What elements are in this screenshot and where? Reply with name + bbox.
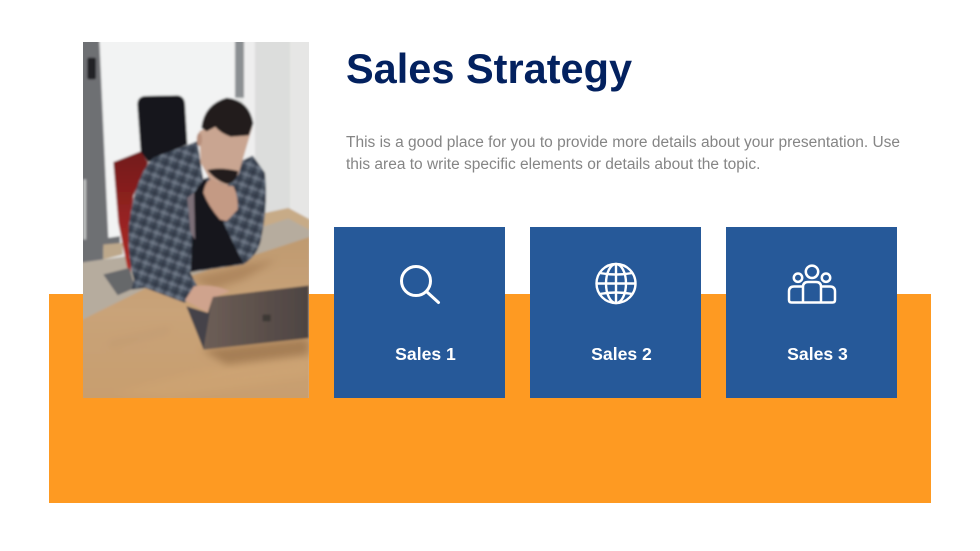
neck and face: [199, 119, 253, 186]
floor and baseboard: [80, 218, 310, 323]
label: Sales 3: Sales 3: [787, 344, 848, 364]
table: [80, 237, 310, 400]
description text: this area to write specific elements or details about the topic.: [346, 156, 760, 173]
label: Sales 1: Sales 1: [395, 344, 456, 364]
laptop: [186, 296, 213, 350]
chair: [137, 95, 187, 162]
title: Sales Strategy: [346, 45, 632, 92]
beard: [207, 169, 238, 184]
orange background band: [49, 294, 931, 503]
shadow beside arm: [190, 260, 277, 290]
dark tee: [191, 178, 243, 272]
wall and window: [80, 39, 313, 400]
hair: [201, 98, 253, 137]
description text: [346, 134, 900, 173]
icon: group of people: [788, 264, 836, 304]
card: Sales 2: [530, 227, 701, 398]
icon: globe: [595, 262, 637, 304]
card: Sales 3: [726, 227, 897, 398]
shadow under laptop: [202, 338, 309, 365]
typing hand: [185, 286, 230, 312]
icon: magnifying glass: [400, 265, 440, 304]
photo: man working at laptop: [83, 42, 309, 398]
label: Sales 2: Sales 2: [591, 344, 652, 364]
shirt: [128, 141, 266, 303]
hand on chin: [203, 179, 238, 221]
card: Sales 1: [334, 227, 505, 398]
description text: This is a good place for you to provide more details about your presentation. Use: [346, 134, 900, 151]
